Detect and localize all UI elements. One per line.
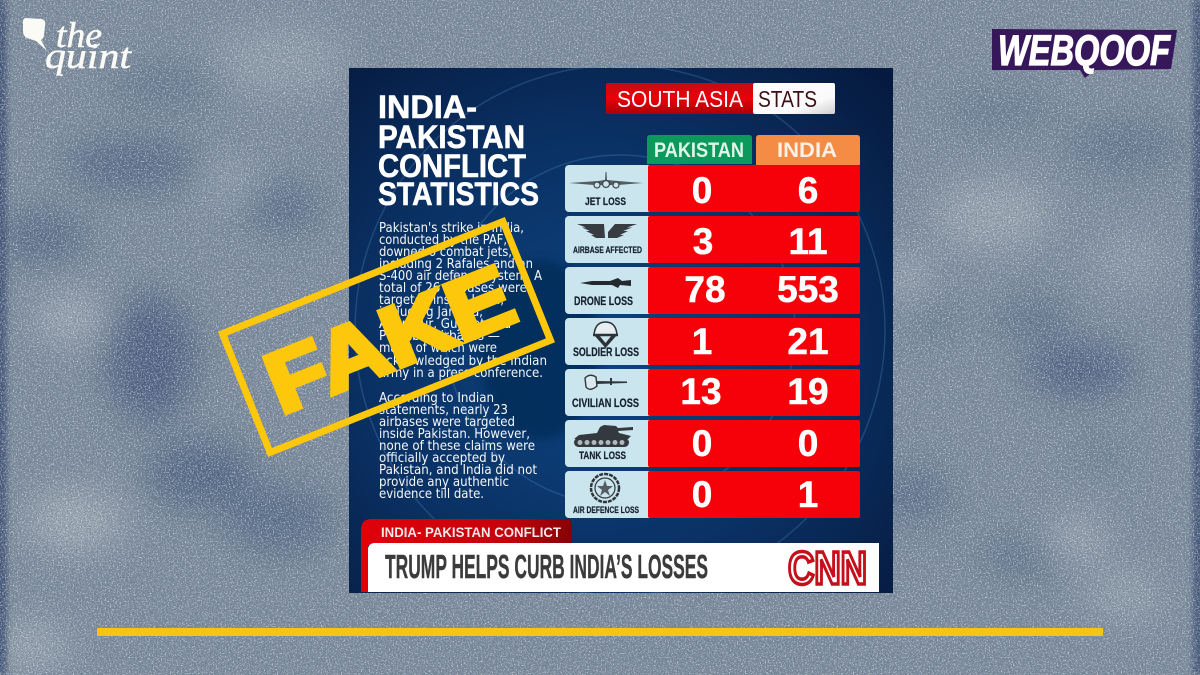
row: soldier loss: 21 bbox=[787, 321, 829, 362]
row: soldier loss bbox=[565, 318, 860, 365]
text block: Pakistan's claims: Adampur, Gujarat and bbox=[379, 317, 511, 332]
text block: Indian statements: Pakistan, and India did not bbox=[379, 463, 537, 478]
icon: weapon bbox=[585, 375, 627, 389]
text block: Indian statements: According to Indian bbox=[379, 391, 494, 406]
row: civilian loss: 13 bbox=[680, 371, 722, 412]
column header: India bbox=[756, 135, 860, 165]
radar arcs and map backdrop bbox=[355, 65, 885, 595]
text block: Pakistan's claims: including Jammu, bbox=[379, 305, 483, 320]
row: civilian loss: 19 bbox=[787, 371, 829, 412]
heading: CONFLICT bbox=[378, 148, 526, 184]
row: air defence loss bbox=[565, 471, 860, 518]
lower third: news ticker: INDIA- PAKISTAN CONFLICT bbox=[381, 524, 561, 540]
row: tank loss: 0 bbox=[798, 423, 818, 464]
row: drone loss bbox=[565, 267, 860, 314]
heading: STATISTICS bbox=[378, 176, 539, 212]
South Asia Stats banner: STATS bbox=[758, 86, 817, 112]
row: jet loss: JET LOSS bbox=[585, 196, 626, 208]
text block: Pakistan's claims: conducted by the PAF, bbox=[379, 233, 507, 248]
row: jet loss: 0 bbox=[692, 170, 712, 211]
icon: helmet bbox=[593, 322, 618, 348]
logo: the quint bbox=[23, 15, 132, 76]
text block: Pakistan's claims: acknowledged by the Indian bbox=[379, 354, 547, 369]
dark edge strips bbox=[0, 0, 7, 675]
text block: Pakistan's claims: Punjab's airbases — bbox=[379, 329, 500, 344]
text block: Indian statements bbox=[379, 391, 537, 502]
row: jet loss: 6 bbox=[798, 170, 818, 211]
text block: Pakistan's claims: total of 26 airbases were bbox=[379, 281, 527, 296]
text block: Pakistan's claims: S-400 air defence system. A bbox=[379, 269, 543, 284]
heading bbox=[378, 89, 539, 212]
logo: CNN: CNN bbox=[788, 542, 867, 594]
text block: Pakistan's claims: including 2 Rafales and an bbox=[379, 257, 533, 272]
row: tank loss: TANK LOSS bbox=[579, 450, 626, 462]
row: tank loss: 0 bbox=[692, 423, 712, 464]
yellow rule bbox=[97, 628, 1103, 636]
text block: Pakistan's claims: Pakistan's strike in India, bbox=[379, 221, 524, 236]
row: air defence loss: 1 bbox=[798, 474, 818, 515]
row: civilian loss bbox=[565, 369, 860, 416]
row: airbase affected: 11 bbox=[788, 221, 828, 262]
stamp: FAKE: FAKE bbox=[252, 247, 527, 432]
stamp: FAKE bbox=[223, 222, 550, 452]
logo: the quint: the bbox=[56, 15, 102, 55]
row: jet loss bbox=[565, 165, 860, 212]
heading: INDIA- bbox=[378, 89, 477, 125]
South Asia Stats banner: SOUTH ASIA bbox=[617, 86, 743, 112]
heading: PAKISTAN bbox=[378, 119, 525, 155]
icon: tank bbox=[574, 425, 633, 447]
icon: drone missile bbox=[580, 278, 631, 288]
column header: Pakistan: PAKISTAN bbox=[654, 139, 744, 162]
row: tank loss bbox=[565, 420, 860, 467]
row: drone loss: 78 bbox=[684, 269, 726, 310]
row: airbase affected: AIRBASE AFFECTED bbox=[573, 245, 642, 256]
column header: India: INDIA bbox=[777, 139, 837, 162]
row: airbase affected bbox=[565, 216, 860, 263]
South Asia Stats banner bbox=[606, 83, 835, 114]
text block: Indian statements: inside Pakistan. However, bbox=[379, 427, 530, 442]
lower third: news ticker bbox=[361, 519, 879, 594]
text block: Indian statements: officially accepted by bbox=[379, 451, 505, 466]
row: soldier loss: 1 bbox=[692, 321, 712, 362]
text block: Pakistan's claims: downed 6 combat jets, bbox=[379, 245, 512, 260]
text block: Indian statements: evidence till date. bbox=[379, 487, 484, 502]
text block: Pakistan's claims: army in a press conference. bbox=[379, 366, 543, 381]
text block: Indian statements: none of these claims were bbox=[379, 439, 535, 454]
row: airbase affected: 3 bbox=[693, 221, 713, 262]
row: drone loss: DRONE LOSS bbox=[574, 294, 633, 308]
text block: Pakistan's claims: many of which were bbox=[379, 341, 497, 356]
logo: the quint: quint bbox=[45, 36, 132, 76]
text block: Pakistan's claims bbox=[379, 221, 547, 381]
text block: Indian statements: statements, nearly 23 bbox=[379, 403, 508, 418]
text block: Indian statements: provide any authentic bbox=[379, 475, 509, 490]
icon: jet bbox=[569, 172, 643, 188]
row: civilian loss: CIVILIAN LOSS bbox=[572, 398, 639, 410]
icon: wings bbox=[577, 224, 637, 238]
icon: air defence badge bbox=[591, 474, 619, 502]
row: soldier loss: SOLDIER LOSS bbox=[573, 347, 639, 359]
panel: infographic card bbox=[349, 65, 893, 595]
lower third: news ticker: TRUMP HELPS CURB INDIA’S LOSSES bbox=[385, 548, 708, 585]
row: air defence loss: 0 bbox=[692, 474, 712, 515]
text block: Indian statements: airbases were targeted bbox=[379, 415, 515, 430]
row: drone loss: 553 bbox=[777, 269, 839, 310]
row: air defence loss: AIR DEFENCE LOSS bbox=[573, 505, 639, 516]
text block: Pakistan's claims: targeted inside India, bbox=[379, 293, 504, 308]
